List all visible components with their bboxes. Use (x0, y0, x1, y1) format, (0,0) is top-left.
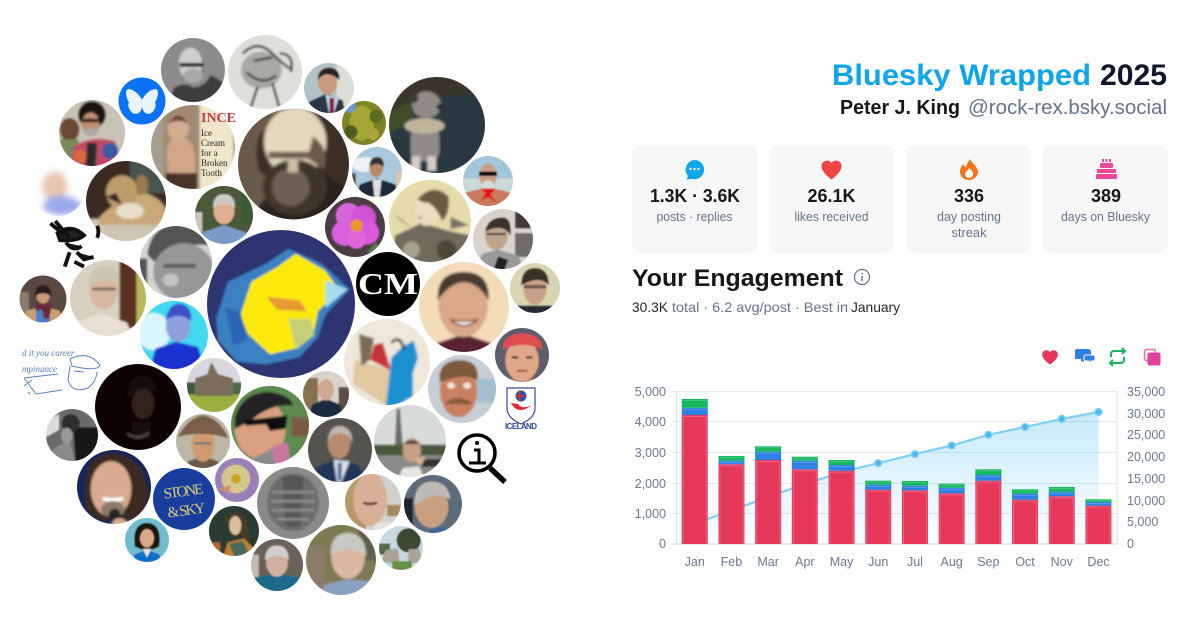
subtitle: name and handle: @rock-rex.bsky.social (968, 97, 1167, 119)
panel: posts and replies card (632, 145, 757, 253)
avatar: Stone Sky book cover (153, 468, 215, 530)
avatar: grey man with glasses (161, 38, 225, 102)
month labels: Nov (1051, 555, 1074, 569)
right axis labels: 15,000 (1127, 472, 1165, 486)
avatar: portrait with red bandana (495, 328, 549, 382)
panel: avatar bubble cloud (20, 35, 560, 595)
avatar: stylised painted woman (389, 180, 471, 262)
avatar: man with moustache pulling a face (428, 355, 496, 423)
avatar: CM logo: CM (358, 266, 418, 301)
icon: info circle (854, 270, 870, 284)
avatar: white haired man with glasses (70, 260, 146, 336)
avatar: bald man in hoodie (303, 371, 349, 417)
avatar: megalithic stones and tree (368, 515, 434, 581)
right axis labels: 20,000 (1127, 450, 1165, 464)
text: engagement summary: total · 6.2 avg/post · Best in (672, 299, 848, 315)
icon: flame (960, 159, 978, 180)
panel: days on Bluesky card (1043, 145, 1168, 253)
avatar: man with glasses and turtleneck (473, 209, 533, 269)
right axis labels (1127, 385, 1165, 551)
avatar: blue ink sketch with handwriting: d it you career (22, 348, 75, 358)
avatar: smiling man in navy suit (308, 418, 372, 482)
avatar: black ink pirate cartoon (50, 221, 98, 267)
avatar: large yellow and blue painted head (207, 230, 355, 378)
cumulative area (695, 412, 1098, 544)
avatar: bald man with red neckerchief (463, 156, 513, 206)
stat value: 336 (954, 186, 984, 206)
avatar: man in suit and red tie (304, 63, 354, 113)
avatar: blurred pale portrait (38, 168, 82, 216)
avatar: Bluesky butterfly logo (118, 78, 166, 124)
avatar: cyan tinted man (140, 301, 208, 369)
avatar text: book cover words: Cream (201, 138, 225, 148)
avatar: book page Ice Cream for a Broken Tooth (151, 105, 235, 189)
avatar: woman in teal background with blue blazer (114, 507, 180, 573)
icon: reposts arrows (1110, 348, 1125, 366)
avatar: green shrub (342, 101, 386, 145)
stat label: likes received (794, 210, 869, 224)
avatar: abbey ruins (187, 358, 241, 412)
subtitle: name and handle (840, 97, 1167, 119)
month labels: Aug (941, 555, 963, 569)
stat value: 1.3K · 3.6K (650, 186, 740, 206)
icon: replies bubbles (1075, 349, 1095, 364)
stat label: posts · replies (656, 210, 732, 224)
avatar: bearded Victorian man (238, 108, 349, 220)
panel: likes card (769, 145, 894, 253)
left axis labels: 2,000 (635, 477, 666, 491)
month labels: Dec (1087, 555, 1110, 569)
left axis labels: 0 (659, 537, 666, 551)
avatar: smiling man in checked shirt (195, 186, 253, 244)
right axis labels: 35,000 (1127, 385, 1165, 399)
right axis labels: 10,000 (1127, 494, 1165, 508)
avatar text: book cover words: Tooth (201, 168, 222, 178)
grid lines and axes (672, 391, 1117, 544)
avatar: man pointing under an obelisk (374, 405, 446, 477)
stat value: 26.1K (808, 186, 856, 206)
month labels: Sep (977, 555, 1000, 569)
stat label: days on Bluesky (1061, 210, 1151, 224)
avatar: man in patterned jacket (59, 100, 125, 166)
avatar: long haired man with microphone (77, 450, 151, 524)
chart: monthly stacked engagement bars with cumulative line (635, 385, 1165, 569)
avatar: grey haired smiling man (390, 460, 476, 548)
avatar: tan dog lying down (86, 161, 166, 241)
month labels: Jun (868, 555, 888, 569)
avatar text: book cover words: Broken (201, 158, 228, 168)
avatar: man with glasses and grey hair (510, 263, 560, 313)
avatar: black and white photographer with hand (46, 409, 98, 461)
stat label: streak (952, 226, 987, 240)
avatar: CM logo (356, 252, 420, 316)
icon: chat bubble (686, 160, 704, 180)
month labels: Mar (757, 555, 779, 569)
stat label (937, 210, 1001, 240)
avatar: small dog on road (389, 77, 485, 173)
icon: quotes copies (1144, 350, 1160, 366)
icon: magnifying glass with info i (459, 435, 505, 482)
bars: replies series (682, 408, 1111, 506)
avatar: Stone Sky book cover: STONE (163, 481, 204, 503)
avatar: Stone Sky book cover: & SKY (167, 500, 207, 522)
text: engagement summary (632, 299, 900, 315)
avatar: yellow thistle flower (215, 458, 259, 502)
month labels: May (830, 555, 854, 569)
icon: heart (822, 161, 842, 180)
month labels: Apr (795, 555, 815, 569)
subtitle: name and handle: Peter J. King (840, 97, 960, 119)
left axis labels: 4,000 (635, 415, 666, 429)
avatar: dark moody portrait of a young man (95, 364, 181, 450)
stat label: day posting (937, 210, 1001, 224)
avatar: elderly man with white hair outdoors (288, 508, 394, 612)
avatar: Iceland shield logo: ICELAND (505, 422, 537, 431)
stat value: 389 (1091, 186, 1121, 206)
avatar: older man in dark hat, black and white (140, 226, 212, 298)
right axis labels: 5,000 (1127, 515, 1158, 529)
avatar: pink flower (325, 197, 385, 257)
text: engagement summary: January (851, 299, 900, 315)
avatar text: book cover words: INCE (201, 111, 236, 126)
avatar: trilobite fossil (257, 467, 329, 539)
bars: reposts series (682, 399, 1111, 502)
avatar text: book cover words: for a (201, 148, 218, 158)
avatar: medieval manuscript with blue bird (344, 319, 430, 405)
right axis labels: 0 (1127, 537, 1134, 551)
month labels (685, 555, 1110, 569)
bars: likes series (682, 415, 1111, 544)
icon: likes heart (1042, 350, 1058, 364)
left axis labels: 3,000 (635, 446, 666, 460)
text: engagement summary: 30.3K (632, 299, 669, 315)
avatar text: book cover words (201, 111, 236, 178)
title: Bluesky Wrapped 2025: Bluesky Wrapped (832, 59, 1091, 92)
month labels: Feb (721, 555, 742, 569)
avatar: Iceland shield logo (505, 388, 537, 431)
month labels: Jul (907, 555, 923, 569)
cumulative line (695, 412, 1098, 523)
avatar: woman with scarf (20, 276, 66, 322)
heading: Your Engagement: Your Engagement (632, 265, 843, 292)
right axis labels: 25,000 (1127, 428, 1165, 442)
title: Bluesky Wrapped 2025: 2025 (1100, 59, 1167, 92)
bars: inner highlight strokes (683, 400, 1110, 546)
month labels: Oct (1015, 555, 1035, 569)
month labels: Jan (685, 555, 705, 569)
avatar: man in dark blazer under blue sky (352, 147, 402, 197)
left axis labels: 1,000 (635, 507, 666, 521)
avatar text: book cover words: Ice (201, 128, 212, 138)
avatar: man in cap and sunglasses (231, 386, 309, 464)
left axis labels (635, 385, 666, 551)
panel: posting streak card (906, 145, 1031, 253)
avatar: blue ink sketch with handwriting: mpinance (22, 364, 57, 374)
avatar: pencil caricature (228, 35, 302, 109)
cumulative line points (801, 409, 1102, 488)
avatar: painted cowboy (176, 414, 230, 468)
right axis labels: 30,000 (1127, 407, 1165, 421)
avatar: medieval painted woman (196, 494, 272, 568)
avatar: older man in blue sweater (238, 526, 316, 604)
chart legend icons (1042, 348, 1160, 366)
avatar: blue ink sketch with handwriting (22, 348, 100, 394)
avatar: blonde woman close-up (345, 474, 401, 530)
avatar: smiling man on cream background (419, 262, 509, 352)
icon: birthday cake (1096, 159, 1117, 179)
left axis labels: 5,000 (635, 385, 666, 399)
